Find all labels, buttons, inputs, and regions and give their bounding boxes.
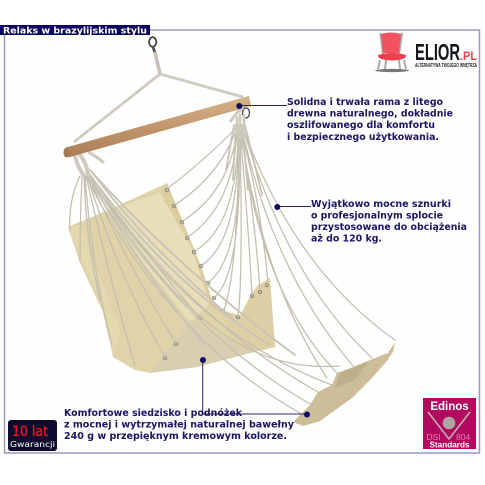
hanging hook and ropes	[74, 37, 243, 142]
thick rope bundle	[86, 125, 295, 355]
callout: wooden frame: i bezpiecznego użytkowania.	[287, 132, 439, 143]
left rope knot	[74, 150, 104, 176]
badge: Edinos standards: DSI	[426, 432, 441, 442]
hammock illustration	[64, 37, 395, 426]
logo: Elior: ELIOR	[415, 39, 460, 65]
logo: Elior	[375, 32, 477, 72]
wooden bar	[64, 96, 251, 158]
callout: seat and footrest	[64, 357, 310, 442]
callout: seat and footrest: 240 g w przepięknym kremowym kolorze.	[64, 431, 287, 442]
right rope knot	[230, 108, 250, 140]
ropes from right knot	[168, 128, 395, 378]
badge: 10 years warranty: 10 lat	[12, 424, 48, 440]
hammock seat fabric	[68, 183, 275, 373]
icon: red chair	[375, 32, 409, 72]
footrest fabric	[293, 342, 395, 426]
callout: wooden frame: drewna naturalnego, dokładnie	[287, 108, 453, 120]
callout: ropes: o profesjonalnym splocie	[311, 211, 443, 222]
callout: seat and footrest: z mocnej i wytrzymałej naturalnej bawełny	[64, 420, 295, 430]
ropes from left knot	[70, 175, 340, 413]
callout: ropes	[274, 199, 467, 244]
callout: wooden frame	[236, 97, 453, 143]
badge: 10 years warranty	[8, 420, 57, 451]
callout: ropes: aż do 120 kg.	[311, 234, 382, 244]
callout: ropes: przystosowane do obciążenia	[311, 222, 467, 233]
badge: Edinos standards	[423, 398, 476, 450]
grommets	[163, 188, 269, 360]
title tab: Relaks w brazylijskim stylu	[3, 26, 147, 36]
callout: wooden frame: Solidna i trwała rama z litego	[287, 97, 443, 108]
badge: Edinos standards: Standards	[429, 440, 470, 450]
badge: Edinos standards: 804	[456, 432, 470, 442]
callout: seat and footrest: Komfortowe siedzisko i podnóżek	[64, 407, 242, 419]
logo: Elior: .PL	[460, 51, 477, 63]
badge: 10 years warranty: Gwarancji	[10, 440, 55, 449]
callout: ropes: Wyjątkowo mocne sznurki	[311, 199, 451, 210]
callout: wooden frame: oszlifowanego dla komfortu	[287, 120, 435, 131]
badge: Edinos standards: Edinos	[430, 401, 469, 413]
